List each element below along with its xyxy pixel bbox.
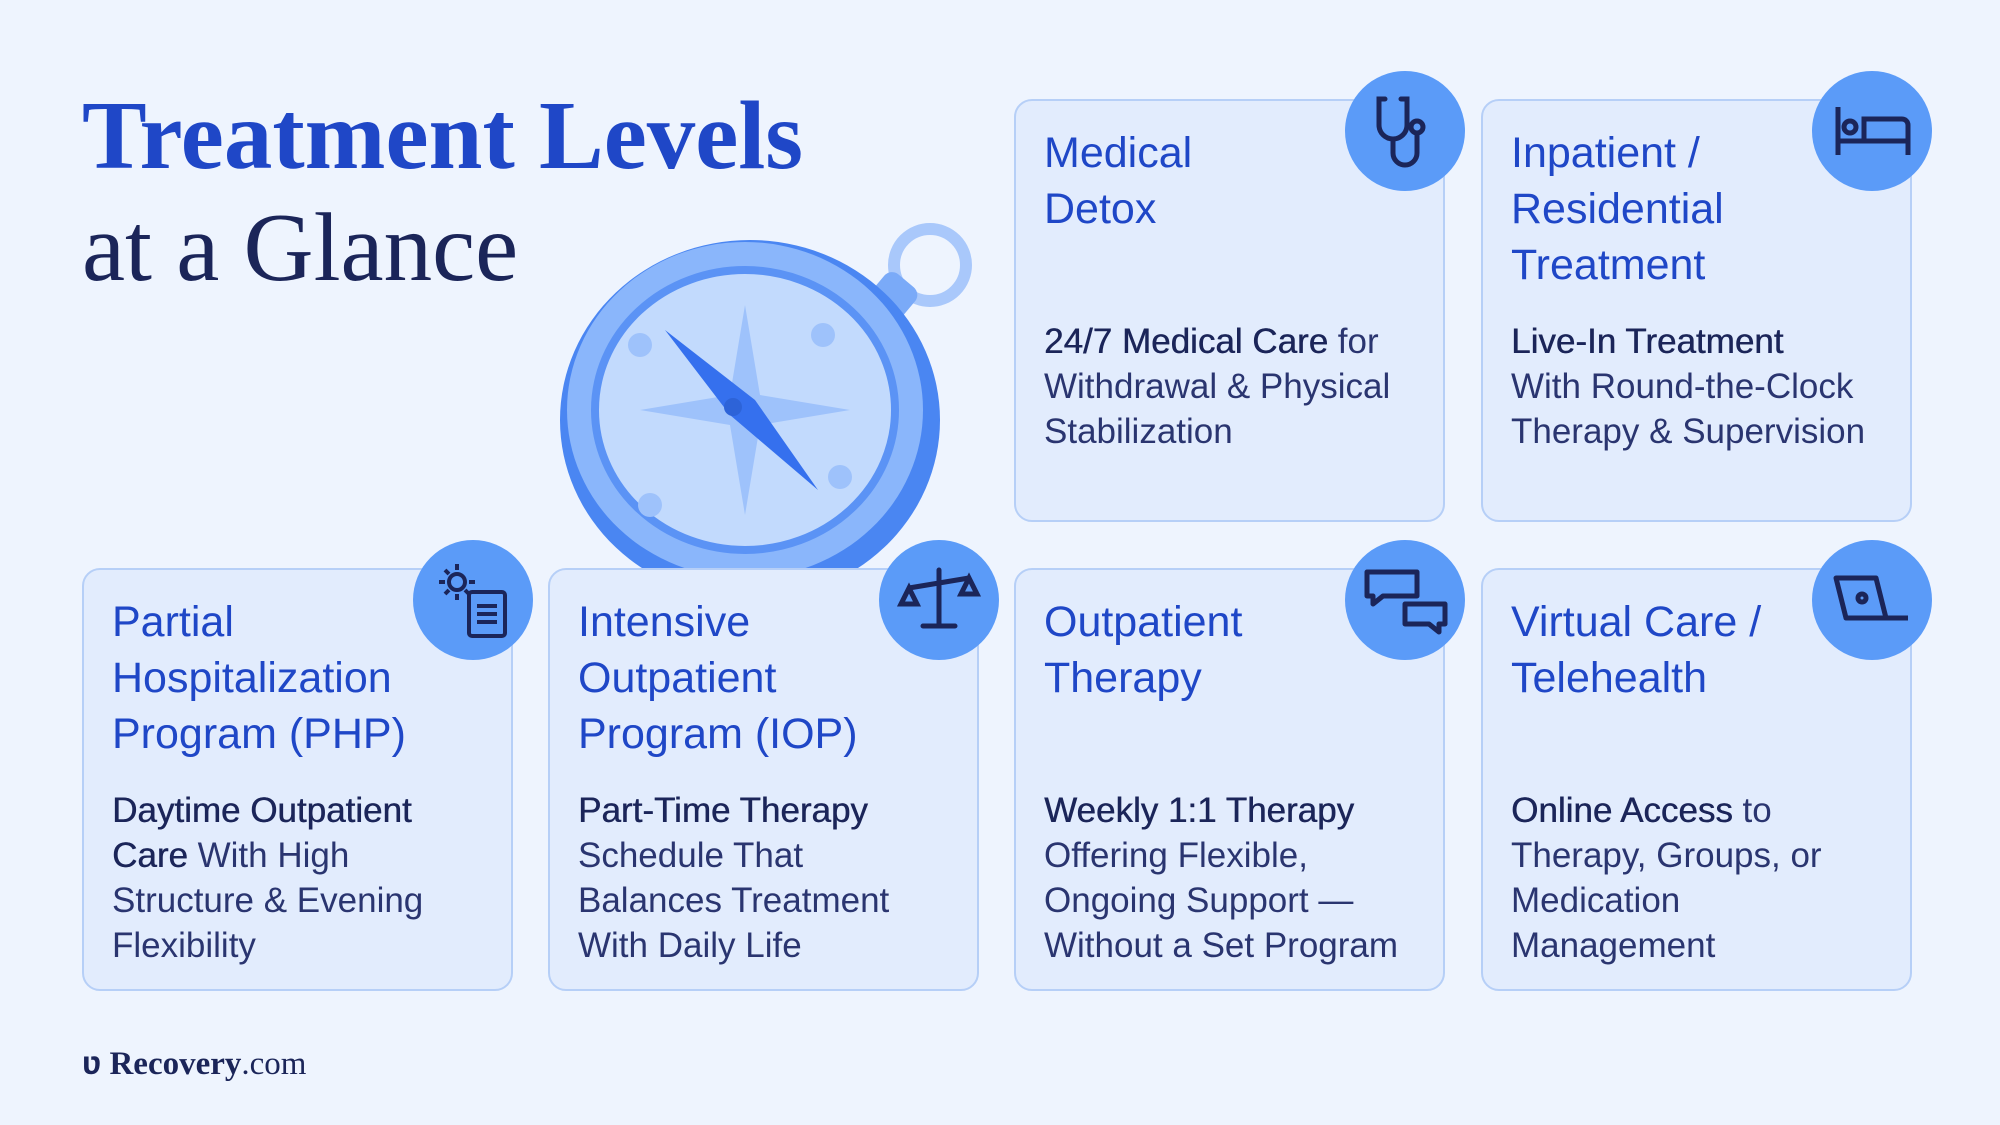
card: Outpatient: Therapy xyxy=(1044,654,1202,702)
card: Inpatient: With Round-the-Clock Therapy & Supervision xyxy=(1511,367,1865,451)
icon: laptop xyxy=(1812,540,1932,660)
illustration: compass xyxy=(560,223,972,568)
card: Virtual: Online Access to Therapy, Groups, or Medication Management xyxy=(1511,791,1822,965)
card: Medical Detox: Medical xyxy=(1044,129,1192,177)
logo: ʋ Recovery.com xyxy=(82,1044,306,1082)
card: IOP xyxy=(548,568,979,991)
card: Virtual: Telehealth xyxy=(1511,654,1707,702)
card: Inpatient: Inpatient / xyxy=(1511,129,1700,177)
icon: bed xyxy=(1812,71,1932,191)
title xyxy=(82,82,803,301)
card: Inpatient: Residential xyxy=(1511,185,1724,233)
card: PHP xyxy=(82,568,513,991)
card: Outpatient: Weekly 1:1 Therapy Offering Flexible, Ongoing Support — Without a Set Program xyxy=(1044,791,1398,965)
card: IOP: Program (IOP) xyxy=(578,710,858,758)
card: Inpatient: Live-In Treatment xyxy=(1511,322,1783,361)
card: Medical Detox: Detox xyxy=(1044,185,1156,233)
icon: sun clipboard xyxy=(413,540,533,660)
card: Inpatient xyxy=(1481,99,1912,522)
icon: stethoscope xyxy=(1345,71,1465,191)
card: Virtual: Virtual Care / xyxy=(1511,598,1761,646)
card: IOP: Outpatient xyxy=(578,654,776,702)
card: Virtual xyxy=(1481,568,1912,991)
card: Inpatient: Treatment xyxy=(1511,241,1705,289)
title: Treatment Levels xyxy=(82,82,803,189)
card: IOP: Intensive xyxy=(578,598,750,646)
card: PHP: Hospitalization xyxy=(112,654,392,702)
card: Medical Detox xyxy=(1014,99,1445,522)
card: Outpatient: Outpatient xyxy=(1044,598,1242,646)
icon: chat xyxy=(1345,540,1465,660)
icon: scale xyxy=(879,540,999,660)
card: Medical Detox: 24/7 Medical Care for Withdrawal & Physical Stabilization xyxy=(1044,322,1390,451)
card: IOP: Part-Time Therapy Schedule That Balances Treatment With Daily Life xyxy=(578,791,889,965)
card: PHP: Daytime Outpatient Care With High Structure & Evening Flexibility xyxy=(112,791,423,965)
title: at a Glance xyxy=(82,194,518,301)
card: Outpatient xyxy=(1014,568,1445,991)
card: PHP: Program (PHP) xyxy=(112,710,406,758)
card: PHP: Partial xyxy=(112,598,234,646)
